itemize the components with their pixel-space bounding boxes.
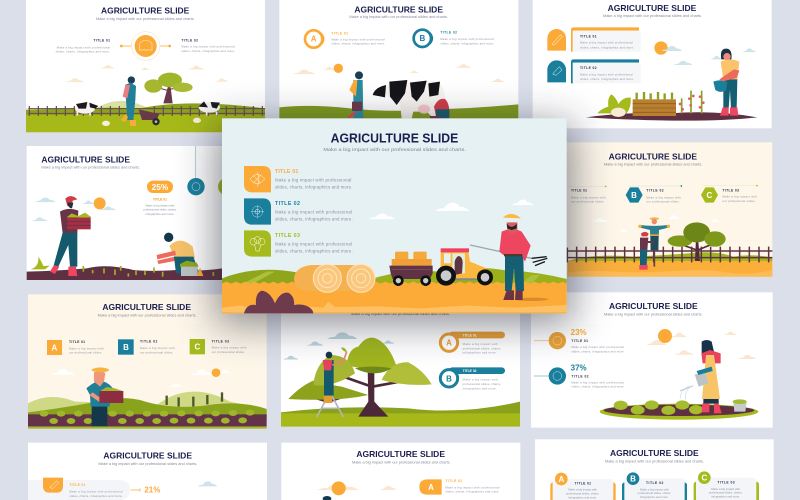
badge A: A xyxy=(311,35,317,44)
tile A: A xyxy=(51,343,57,352)
panel: slide 6 lower left xyxy=(28,294,267,429)
sun and clouds xyxy=(32,197,116,221)
card B: professional slides, charts, xyxy=(638,491,671,495)
badge B with pill xyxy=(440,367,505,387)
card 2: Make a big impact with professional xyxy=(580,72,633,76)
cloud xyxy=(198,481,217,486)
slide 9 subtitle: Make a big impact with our professional slides and charts. xyxy=(98,462,197,466)
farmer with crate xyxy=(50,196,92,276)
tile B text: our professional slides. xyxy=(140,350,174,354)
badge B text xyxy=(440,31,494,45)
badge B with pill: B xyxy=(446,374,452,383)
tile A text xyxy=(69,340,104,355)
slide 1 text right: TITLE 02 xyxy=(181,39,198,43)
landscape and fence xyxy=(26,101,265,132)
panel: slide 11 bottom right xyxy=(535,439,774,500)
badge B text: professional slides, charts, xyxy=(463,382,501,386)
percent pill xyxy=(147,181,173,193)
column 3 text: Make a big impact with xyxy=(722,195,757,199)
icon: central orange circle xyxy=(120,32,171,60)
sun and clouds xyxy=(293,64,504,82)
green hills xyxy=(222,268,567,287)
slide 10 subtitle: Make a big impact with our professional slides and charts. xyxy=(352,460,451,464)
card C: TITLE 03 xyxy=(717,481,735,485)
cow xyxy=(373,80,445,118)
hexagon C: C xyxy=(706,191,712,200)
column 3 text xyxy=(703,185,758,203)
panel: slide 4 middle left xyxy=(27,146,235,280)
card 1: slides, charts, infographics and more. xyxy=(580,45,634,49)
column 3 text: TITLE 03 xyxy=(722,189,739,193)
slide 1 subtitle: Make a big impact with our professional slides and charts. xyxy=(96,17,195,21)
item 1 text: TITLE 01 xyxy=(275,169,298,175)
badge B text: Make a big impact with professional xyxy=(440,37,494,41)
hills with trees xyxy=(28,392,267,418)
panel: slide 9 bottom left xyxy=(28,443,267,500)
shadow of centre slide xyxy=(216,124,573,324)
stat 23%: 23% xyxy=(571,328,587,337)
stat 37%: slides, charts, infographics and more. xyxy=(571,385,625,389)
slide 1 text left: Make a big impact with professional xyxy=(57,45,110,49)
stat 37% xyxy=(571,363,625,389)
cows xyxy=(75,101,220,116)
heading: AGRICULTURE SLIDE xyxy=(331,132,458,146)
slide 3 subtitle: Make a big impact with our professional slides and charts. xyxy=(603,14,702,18)
slide 8 subtitle: Make a big impact with our professional slides and charts. xyxy=(604,312,703,316)
bucket of cabbages xyxy=(733,399,747,412)
stat 23%: TITLE 01 xyxy=(571,339,588,343)
panel: slide 1 top left xyxy=(26,0,265,132)
stat 23%: Make a big impact with professional xyxy=(571,345,624,349)
soil rows with cabbages xyxy=(28,410,267,429)
slide 4 heading: AGRICULTURE SLIDE xyxy=(41,154,130,164)
card 2: slides, charts, infographics and more. xyxy=(580,77,634,81)
badge B text: Make a big impact with xyxy=(463,378,498,382)
panel: slide 7 lower centre xyxy=(281,305,520,427)
tile B xyxy=(118,339,134,355)
card C: C xyxy=(701,474,707,483)
panel: slide 3 top right xyxy=(533,0,772,128)
card A: A xyxy=(558,475,564,484)
card C: professional slides, charts, xyxy=(709,491,743,495)
badge A: A xyxy=(428,483,434,492)
panel: slide 10 bottom centre xyxy=(281,443,520,500)
slide 7 subtitle: Make a big impact with our professional slides and charts. xyxy=(351,312,450,316)
badge A text: TITLE 01 xyxy=(445,479,462,483)
stat 37%: Make a big impact with professional xyxy=(571,380,624,384)
item 3 text xyxy=(275,233,353,253)
farmer beside scarecrow xyxy=(639,232,654,270)
badge A xyxy=(419,479,442,495)
column 2 text: Make a big impact with xyxy=(646,195,681,199)
icon orange on line xyxy=(534,332,566,349)
card A: TITLE 01 xyxy=(575,482,591,486)
badge A text: professional slides, charts, xyxy=(463,346,501,350)
item 2 text xyxy=(275,201,353,221)
item 2 text: TITLE 02 xyxy=(275,201,300,207)
panel: slide 2 top centre xyxy=(279,0,518,125)
milking farmer xyxy=(430,99,449,119)
icon tile: orange xyxy=(244,166,271,192)
slide 1 heading: AGRICULTURE SLIDE xyxy=(101,6,190,16)
icon tile: teal xyxy=(244,198,271,225)
column 1 text: TITLE 01 xyxy=(571,189,587,193)
column 3 text: our professional slides. xyxy=(722,199,756,203)
slide 1 text left xyxy=(56,39,110,54)
icon tile orange xyxy=(547,29,566,51)
badge B text: TITLE 02 xyxy=(440,31,457,35)
scarecrow xyxy=(638,217,670,267)
card B: B xyxy=(630,475,636,484)
badge A text xyxy=(445,479,500,494)
green icon partial xyxy=(218,178,235,195)
soil xyxy=(586,112,757,121)
percent text: Make a big impact with xyxy=(146,204,175,208)
title card text xyxy=(69,483,123,498)
panel: centre featured slide xyxy=(222,118,567,313)
tile B text: TITLE 02 xyxy=(140,340,157,344)
percent text: infographics and more. xyxy=(146,212,175,216)
card 2 xyxy=(571,59,641,83)
hexagon B: B xyxy=(631,191,637,200)
item 2 text: Make a big impact with professional xyxy=(275,210,352,215)
column 2 text xyxy=(628,185,682,204)
percent text: professional slides, charts, xyxy=(143,208,177,212)
badge A with pill: TITLE 01 xyxy=(463,333,477,337)
item 3 text: Make a big impact with professional xyxy=(275,242,352,247)
badge A text: slides, charts, infographics and more. xyxy=(331,42,385,46)
farmer hat top xyxy=(323,496,331,500)
sun and clouds xyxy=(647,329,756,359)
card A: professional slides, charts, xyxy=(566,491,600,495)
tile B text: Make a big impact with xyxy=(140,346,175,350)
slide 8 heading: AGRICULTURE SLIDE xyxy=(609,301,698,311)
percent text xyxy=(143,197,177,216)
badge A with pill: A xyxy=(446,339,452,348)
badge A with pill xyxy=(440,332,505,351)
item 3 text: slides, charts, infographics and more. xyxy=(275,248,353,253)
big tree xyxy=(288,338,432,417)
tile A text: our professional slides. xyxy=(69,351,103,355)
farmer with bucket xyxy=(347,71,363,119)
slide 11 heading: AGRICULTURE SLIDE xyxy=(610,448,699,458)
clouds xyxy=(66,65,228,82)
icon teal on line xyxy=(534,367,566,385)
slide 5 heading: AGRICULTURE SLIDE xyxy=(609,151,697,161)
slide 10 heading: AGRICULTURE SLIDE xyxy=(356,449,445,459)
badge B text xyxy=(463,378,501,390)
card C: infographics and more. xyxy=(711,495,740,499)
soil and plants xyxy=(27,257,222,280)
watering woman xyxy=(680,340,722,413)
bush and chicken xyxy=(597,94,631,117)
slide 5 subtitle: Make a big impact with our professional slides and charts. xyxy=(604,163,702,167)
slide 9 heading: AGRICULTURE SLIDE xyxy=(103,451,192,461)
icon tile: green xyxy=(244,230,271,257)
slide 6 subtitle: Make a big impact with our professional slides and charts. xyxy=(98,313,197,317)
tomato plants xyxy=(679,91,705,113)
garden bed xyxy=(600,404,758,420)
item 2 text: slides, charts, infographics and more. xyxy=(275,216,353,221)
badge B text: infographics and more. xyxy=(463,386,497,390)
stat 23%: slides, charts, infographics and more. xyxy=(571,349,625,353)
hills xyxy=(279,104,518,125)
badge A text: Make a big impact with professional xyxy=(331,37,385,41)
tile A text: TITLE 01 xyxy=(69,340,85,344)
card B: TITLE 02 xyxy=(646,481,663,485)
tile B: B xyxy=(123,343,129,352)
slide 1 text right xyxy=(181,39,235,53)
farmer with pitchfork xyxy=(470,214,548,301)
clouds xyxy=(283,332,394,359)
sun and clouds xyxy=(654,41,756,65)
cabbages xyxy=(614,400,703,415)
card C: Make a big impact with xyxy=(711,487,740,491)
subtitle: Make a big impact with our professional slides and charts. xyxy=(323,147,466,153)
kneeling farmer xyxy=(157,233,203,276)
sun and clouds xyxy=(51,368,230,387)
tile C: C xyxy=(194,342,200,351)
hay bales xyxy=(294,264,375,292)
slide 6 heading: AGRICULTURE SLIDE xyxy=(102,302,191,312)
picker on ladder xyxy=(317,347,347,417)
title card xyxy=(28,480,130,500)
hills and ground xyxy=(567,252,772,277)
title card text: TITLE 01 xyxy=(69,483,85,487)
card 2: TITLE 02 xyxy=(580,66,597,70)
farmer with wheelbarrow xyxy=(121,76,160,126)
gardener xyxy=(713,49,739,116)
badge A text: Make a big impact with xyxy=(463,342,498,346)
slide 3 heading: AGRICULTURE SLIDE xyxy=(608,3,697,13)
slide 4 subtitle: Make a big impact with our professional slides and charts. xyxy=(41,166,140,170)
orange ground xyxy=(222,282,567,313)
icon tile orange xyxy=(43,478,63,493)
slide 2 heading: AGRICULTURE SLIDE xyxy=(354,4,443,14)
card 1: TITLE 01 xyxy=(580,34,597,38)
hay trailer xyxy=(389,252,433,286)
badge B with pill: TITLE 02 xyxy=(463,369,477,373)
stat 21% xyxy=(131,486,160,495)
badge A text xyxy=(331,31,385,46)
tree xyxy=(144,73,193,103)
card B: infographics and more. xyxy=(640,495,669,499)
stat 37%: 37% xyxy=(571,363,587,372)
item 1 text xyxy=(275,169,352,189)
badge B xyxy=(414,30,433,47)
tile A text: Make a big impact with xyxy=(69,346,104,350)
column 2 text: TITLE 02 xyxy=(646,189,664,193)
slide 1 text right: Make a big impact with professional xyxy=(181,45,235,49)
clouds xyxy=(369,199,534,219)
panel: slide 5 middle right xyxy=(533,142,772,277)
item 1 text: slides, charts, infographics and more. xyxy=(275,184,352,189)
chickens xyxy=(102,118,201,126)
tile C text: Make a big impact with xyxy=(212,346,247,350)
tractor xyxy=(436,248,493,286)
badge A text: Make a big impact with professional xyxy=(445,485,500,489)
crate with seedlings xyxy=(633,92,676,116)
column 2 text: our professional slides. xyxy=(646,200,680,204)
fence xyxy=(567,247,772,262)
badge A text: TITLE 01 xyxy=(331,31,348,35)
card 1 xyxy=(571,27,641,52)
bush xyxy=(244,291,313,313)
card B xyxy=(622,472,687,500)
slide 1 text right: slides, charts, infographics and more. xyxy=(181,49,235,53)
tile B text xyxy=(140,340,175,354)
stat 21%: 21% xyxy=(144,486,160,495)
title card text: Make a big impact with professional xyxy=(69,490,123,494)
card 1: Make a big impact with professional xyxy=(580,41,633,45)
column 1 text: our professional slides. xyxy=(571,200,605,204)
hills and ground xyxy=(281,402,520,427)
title card text: slides, charts, infographics and more. xyxy=(69,494,123,498)
stat 37%: TITLE 02 xyxy=(571,374,589,378)
column 1 text: Make a big impact with xyxy=(571,195,606,199)
stat 23% xyxy=(571,328,625,353)
item 1 text: Make a big impact with professional xyxy=(275,178,351,183)
percent text: TITLE 01 xyxy=(153,197,167,201)
item 3 text: TITLE 03 xyxy=(275,233,300,239)
badge B text: slides, charts, infographics and more. xyxy=(440,41,494,45)
panel: slide 8 lower right xyxy=(531,292,773,428)
slide 11 subtitle: Make a big impact with our professional slides and charts. xyxy=(605,459,704,463)
icon tile teal xyxy=(547,60,566,82)
hexagon B xyxy=(626,187,643,203)
slide 2 subtitle: Make a big impact with our professional slides and charts. xyxy=(349,15,448,19)
hanging teal icon xyxy=(187,146,205,195)
tile C text xyxy=(212,339,247,354)
card A: Make a big impact with xyxy=(568,488,597,492)
column 1 text xyxy=(567,185,607,204)
badge A xyxy=(305,30,324,48)
percent pill: 25% xyxy=(152,182,169,192)
tree xyxy=(668,222,726,261)
tile C text: our professional slides. xyxy=(212,350,245,354)
card A: infographics and more. xyxy=(568,495,597,499)
farmer with crate xyxy=(86,367,123,426)
badge A text: slides, charts, infographics and more. xyxy=(445,490,500,494)
slide 1 text left: slides, charts, infographics and more. xyxy=(56,50,110,54)
hexagon C xyxy=(701,187,718,203)
tile C text: TITLE 03 xyxy=(212,339,229,343)
slide 1 text left: TITLE 01 xyxy=(93,39,110,43)
badge A text xyxy=(463,342,501,355)
badge B: B xyxy=(419,34,425,43)
card C xyxy=(694,471,759,500)
clouds xyxy=(592,215,720,232)
sun and clouds xyxy=(317,481,397,495)
card B: Make a big impact with xyxy=(640,487,669,491)
tile A xyxy=(47,340,62,355)
card A xyxy=(550,473,616,500)
badge A text: infographics and more. xyxy=(463,351,497,355)
tile C xyxy=(190,339,205,354)
